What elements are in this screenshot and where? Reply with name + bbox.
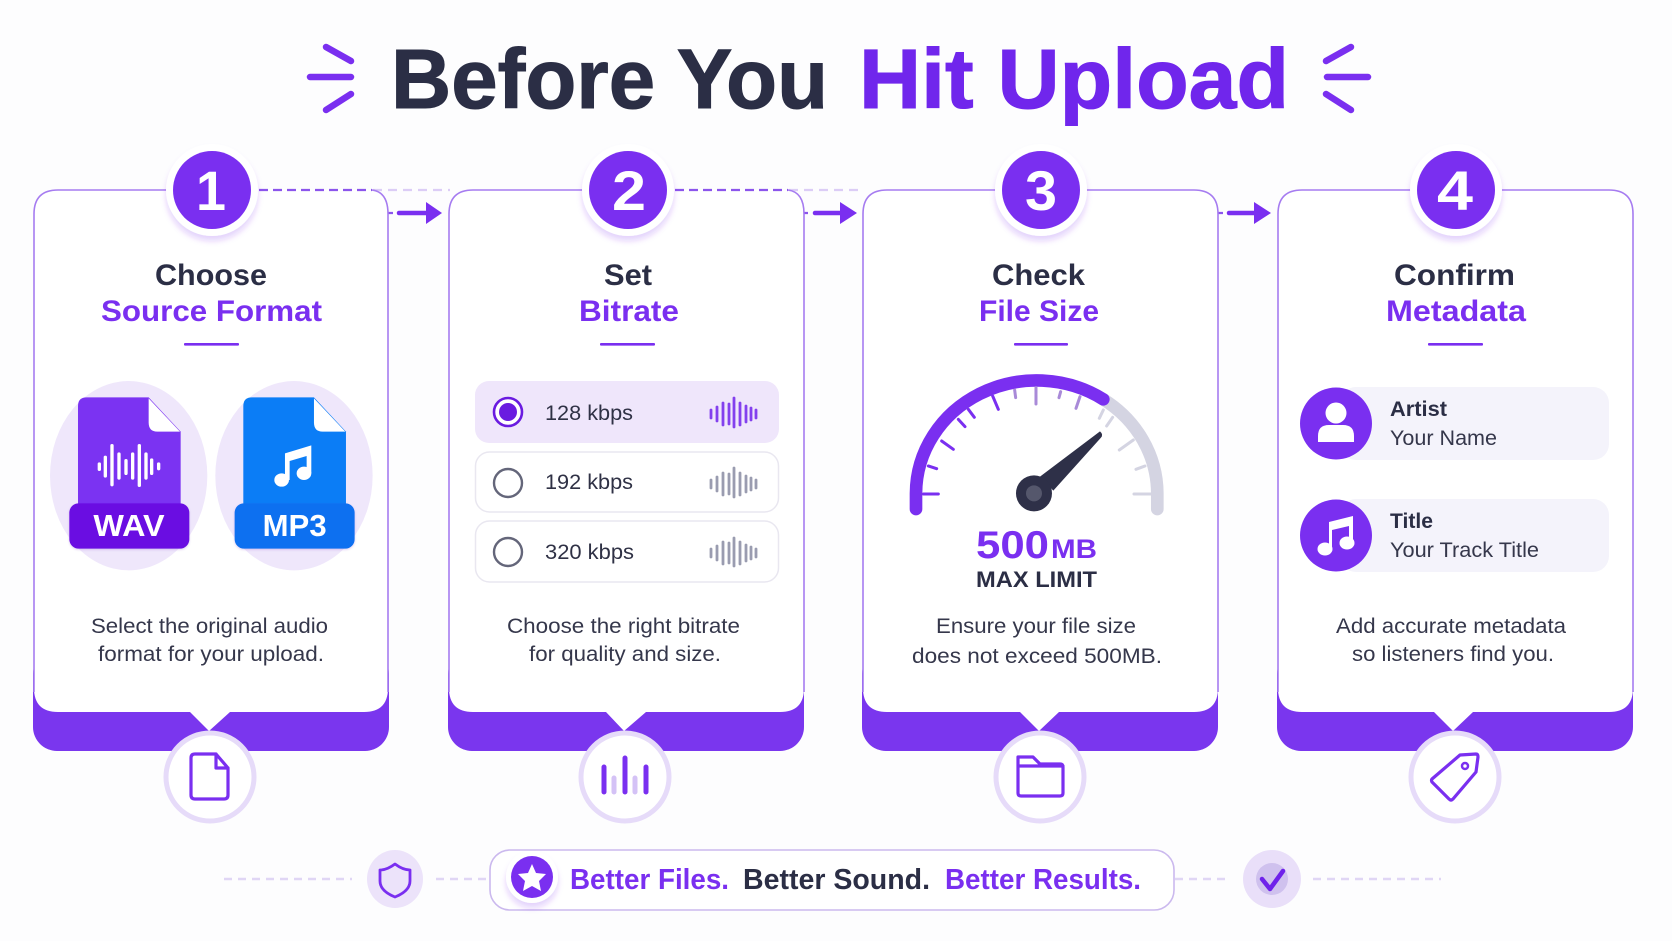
card footer band	[1277, 650, 1633, 751]
description: so listeners find you.	[1352, 643, 1554, 666]
icon: left burst	[310, 47, 351, 110]
icon: right burst	[1326, 47, 1368, 110]
icon: check	[1243, 850, 1301, 908]
gauge chart	[916, 380, 1157, 511]
panel: step 2 set bitrate	[448, 144, 804, 821]
heading: Source Format	[101, 295, 322, 328]
card footer band	[862, 650, 1218, 751]
option: 192 kbps: 192 kbps	[545, 471, 633, 494]
slogan pill: Better Sound.	[743, 864, 930, 896]
footer banner	[224, 850, 1441, 910]
icon: MP3 file	[215, 381, 373, 570]
arrow 3	[1229, 202, 1271, 224]
description: Select the original audio	[91, 615, 328, 638]
icon: MP3 file: MP3	[263, 509, 327, 543]
title text dark: Before You	[391, 32, 828, 126]
number badge 2	[582, 144, 674, 236]
description: Add accurate metadata	[1336, 615, 1566, 638]
heading	[101, 259, 322, 346]
title	[310, 32, 1368, 126]
arrow 1	[399, 202, 442, 224]
heading: Metadata	[1386, 295, 1526, 328]
description	[1336, 615, 1566, 666]
description	[507, 615, 740, 666]
slogan text: Better Files.	[570, 864, 729, 896]
metadata row: title: Your Track Title	[1390, 539, 1539, 562]
metadata row: artist: Artist	[1390, 398, 1447, 421]
gauge value 500MB max limit	[976, 524, 1098, 592]
icon: WAV file	[50, 381, 207, 570]
option: 320 kbps: 320 kbps	[545, 541, 634, 564]
description: Choose the right bitrate	[507, 615, 740, 638]
number badge 3: 3	[1025, 159, 1057, 222]
description	[91, 615, 328, 666]
panel: step 4 confirm metadata	[1277, 144, 1633, 821]
icon: bars badge	[581, 733, 669, 821]
icon: tag badge	[1411, 733, 1499, 821]
description: format for your upload.	[98, 643, 324, 666]
description: for quality and size.	[529, 643, 721, 666]
option: 192 kbps	[476, 452, 778, 512]
metadata row: title: Title	[1390, 510, 1433, 533]
icon: star	[506, 851, 558, 903]
icon: WAV file: WAV	[93, 509, 165, 543]
panel: step 3 check file size	[862, 144, 1218, 821]
metadata row: artist: Your Name	[1390, 427, 1497, 450]
icon: document badge	[166, 733, 254, 821]
heading: Set	[604, 259, 652, 292]
card footer band	[448, 650, 804, 751]
card body	[449, 190, 804, 731]
heading	[979, 259, 1099, 346]
number badge 1	[166, 144, 258, 236]
panel: step 1 choose source format	[33, 144, 389, 821]
description	[912, 615, 1162, 668]
gauge value 500MB max limit: 500	[976, 524, 1049, 567]
connector dashes between cards	[373, 190, 1223, 213]
gauge value 500MB max limit: MAX LIMIT	[976, 567, 1098, 592]
card footer band	[33, 650, 389, 751]
number badge 4	[1410, 144, 1502, 236]
arrow 2	[815, 202, 857, 224]
description: does not exceed 500MB.	[912, 645, 1162, 668]
metadata row: artist	[1300, 387, 1609, 460]
option: 128 kbps selected: 128 kbps	[545, 402, 633, 425]
heading	[1386, 259, 1526, 346]
metadata row: title	[1300, 499, 1609, 572]
heading: Choose	[155, 259, 267, 292]
title text purple: Hit Upload	[859, 32, 1289, 126]
number badge 4: 4	[1437, 159, 1473, 222]
option: 320 kbps	[476, 521, 778, 582]
heading: Bitrate	[579, 295, 679, 328]
slogan pill: Better Results.	[945, 864, 1141, 896]
heading: Confirm	[1394, 259, 1515, 292]
icon: folder badge	[996, 733, 1084, 821]
gauge value 500MB max limit: MB	[1051, 534, 1097, 564]
number badge 2: 2	[612, 159, 646, 222]
slogan pill	[490, 850, 1174, 910]
option: 128 kbps selected	[475, 381, 779, 443]
heading: File Size	[979, 295, 1099, 328]
icon: shield	[367, 850, 423, 908]
description: Ensure your file size	[936, 615, 1136, 638]
heading	[579, 259, 679, 346]
heading: Check	[992, 259, 1085, 292]
card body	[34, 190, 388, 731]
card body	[1278, 190, 1633, 731]
number badge 3	[995, 144, 1087, 236]
card body	[863, 190, 1218, 731]
number badge 1: 1	[196, 159, 226, 222]
